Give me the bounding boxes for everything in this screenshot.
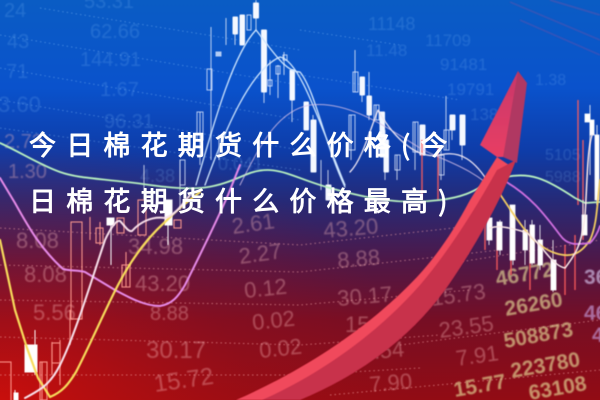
white strand near arrow xyxy=(350,110,490,185)
faded price numbers: red area: 8.88 xyxy=(150,303,189,325)
cream volume numbers: 26260 xyxy=(503,288,564,321)
faded price numbers: blue area: 62.66 xyxy=(90,21,140,43)
faded price numbers: red area: 0.12 xyxy=(243,274,288,303)
faded price numbers: blue area: 5988 xyxy=(545,169,581,186)
candlestick chart: right side candles xyxy=(422,100,599,295)
cream volume numbers: 508873 xyxy=(502,318,575,353)
candlestick chart: lower-left candles xyxy=(0,200,181,400)
yellow moving average xyxy=(0,192,200,397)
purple moving average right xyxy=(503,180,600,244)
arrow shaft outer highlight xyxy=(236,157,509,400)
title line 2: 日棉花期货什么价格最高) xyxy=(29,180,458,219)
faded price numbers: blue area: 11148 xyxy=(368,14,415,34)
faded price numbers: red area: 15 xyxy=(345,312,369,337)
faded price numbers: red area: 3.54 xyxy=(360,336,405,365)
yellow moving average right xyxy=(497,180,600,255)
faded price numbers: blue area: 71 xyxy=(6,61,28,83)
faded price numbers: red area: 2.61 xyxy=(230,208,276,239)
faded price numbers: red area: 43.20 xyxy=(322,213,379,243)
green moving average xyxy=(0,143,600,203)
title xyxy=(29,124,458,219)
faded price numbers: red area: 5.56 xyxy=(33,300,76,325)
faded price numbers: red area: 23.55 xyxy=(437,311,495,343)
cream volume numbers: 46772 xyxy=(494,258,555,291)
faded price numbers: blue area: 24 xyxy=(4,0,26,22)
pink streaks top right xyxy=(510,0,600,55)
faded price numbers: blue area: 5105 xyxy=(545,147,581,164)
faded price numbers: red area: 30.17 xyxy=(336,281,393,311)
faded price numbers: red area: 7.91 xyxy=(454,340,500,371)
arrow head left face xyxy=(480,71,518,157)
arrow: rising red curved arrow xyxy=(236,71,527,400)
faded price numbers: blue area: 96.31 xyxy=(104,111,154,133)
faded price numbers: red area: 8.08 xyxy=(24,262,67,287)
faded price numbers: red area: 7.90 xyxy=(368,368,413,397)
candlestick chart: white and hollow candles, upper area xyxy=(144,0,465,210)
faded price numbers: blue area: 43 xyxy=(7,31,29,53)
pale pink moving average xyxy=(25,195,190,398)
faint lilac moving average xyxy=(240,104,500,195)
faded price numbers: blue area: 11.48 xyxy=(366,41,407,60)
faded price numbers: red area: 8.08 xyxy=(16,228,59,253)
arrow shaft inner shade xyxy=(262,160,516,400)
faded price numbers: blue area: 1.67 xyxy=(100,79,139,101)
faded price numbers: blue area: 1381 xyxy=(470,105,508,124)
white moving average right xyxy=(490,135,592,268)
faded price numbers: blue area xyxy=(0,0,581,186)
faded price numbers: blue area: 144.91 xyxy=(80,49,141,71)
pale blue moving average two xyxy=(205,57,345,185)
faded price numbers: red area: 30.17 xyxy=(146,337,206,364)
faded price numbers: blue area: 0.041 xyxy=(218,154,263,174)
faded price numbers: blue area: 4.38 xyxy=(140,166,175,186)
faded price numbers: red area: 0.02 xyxy=(251,306,296,335)
faded price numbers: red area: 34.98 xyxy=(128,234,183,259)
faded price numbers: red area: 1.30 xyxy=(8,161,47,183)
faded price numbers: blue area: 11709 xyxy=(425,31,471,50)
faded price numbers: red area: 2.73 xyxy=(4,131,43,153)
faded price numbers: blue area: 19791 xyxy=(447,80,494,99)
faded price numbers: red area: 43.20 xyxy=(135,271,190,296)
faded price numbers: red area: 0.02 xyxy=(258,334,303,363)
faded price numbers: red area: 2.27 xyxy=(237,238,283,269)
purple moving average left xyxy=(0,165,240,306)
faded price numbers: blue area: 91481 xyxy=(440,55,487,74)
faded price numbers: blue area: 1.38 xyxy=(535,72,566,89)
pale blue moving average one xyxy=(196,30,345,187)
cream volume numbers: 223780 xyxy=(509,348,582,383)
faded price numbers: red area: 15.72 xyxy=(152,363,215,398)
faded price numbers: red area: 15.73 xyxy=(429,279,487,311)
arrow head right face xyxy=(503,71,527,163)
faded price numbers: red area xyxy=(4,131,500,398)
cream volume numbers xyxy=(452,258,600,400)
title line 1: 今日棉花期货什么价格(今 xyxy=(29,124,458,163)
faded price numbers: red area: 8.88 xyxy=(336,244,381,273)
